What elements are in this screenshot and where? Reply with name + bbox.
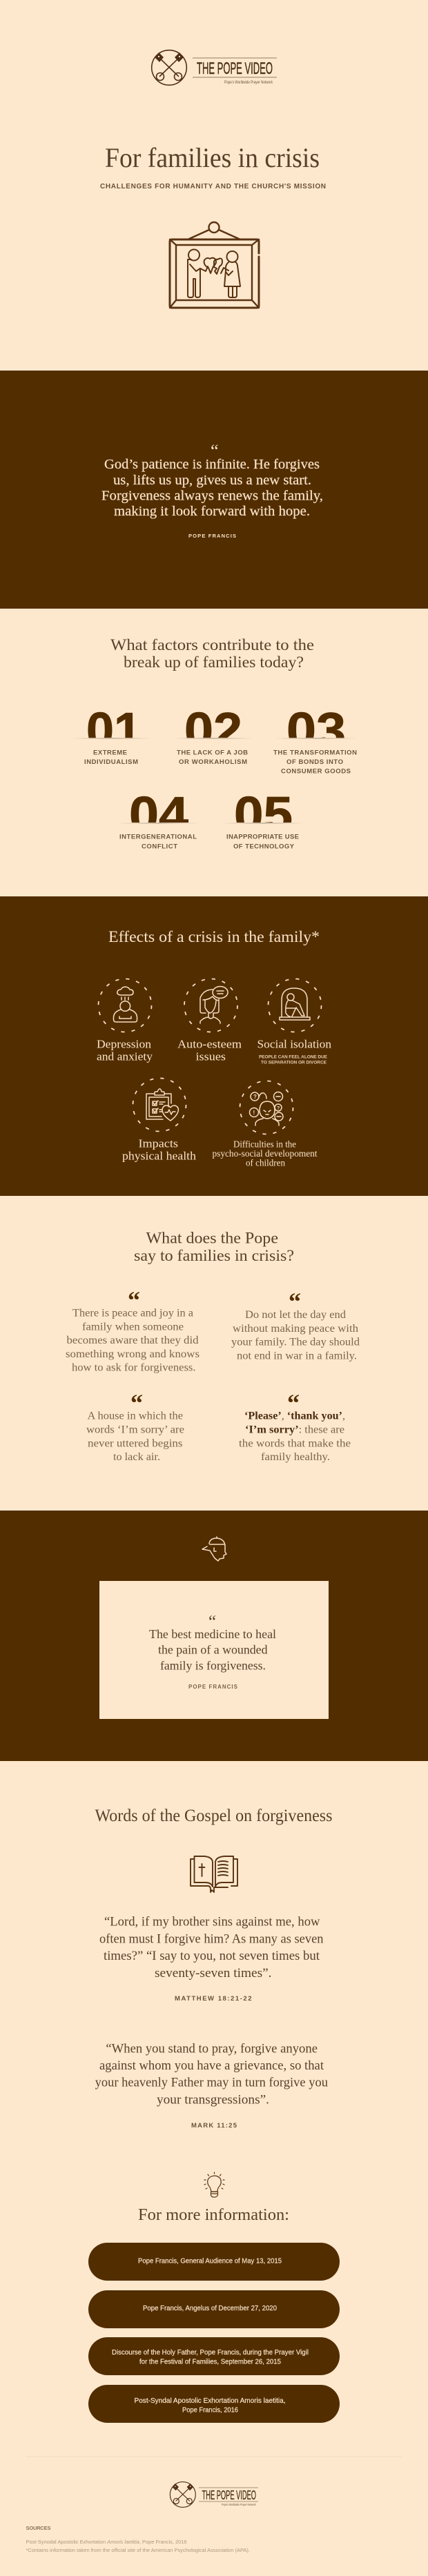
gospel quote: Matthew: often must I forgive him? As many as seven [99, 1931, 324, 1946]
pope quote: please thank you: the words that make the [239, 1437, 351, 1449]
heading: what does the Pope say: say to families in crisis? [134, 1247, 294, 1264]
gospel quote: Mark: your transgressions”. [157, 2092, 269, 2107]
pope quote: sorry: A house in which the [87, 1410, 183, 1422]
attribution: POPE FRANCIS [188, 533, 236, 539]
gospel quote: Mark: against whom you have a grievance, so that [99, 2058, 324, 2073]
icon: light bulb [204, 2172, 224, 2197]
factor 02: 02 [184, 703, 242, 758]
gospel quote: Matthew: times?” “I say to you, not seven times but [104, 1949, 320, 1963]
icon: pope head [202, 1537, 226, 1561]
icon: open bible [191, 1856, 237, 1892]
card quote: the pain of a wounded [158, 1643, 268, 1657]
factor 01: 01 [86, 703, 142, 758]
gospel quote: Matthew: seventy-seven times”. [155, 1966, 272, 1980]
effect: difficulties in psycho-social development: ! [253, 1110, 255, 1116]
footer logo [170, 2482, 258, 2507]
pope quote: peace and joy: There is peace and joy in a [72, 1308, 193, 1319]
effect: difficulties in psycho-social development: ? [253, 1094, 257, 1100]
pope quote: sorry: “ [130, 1389, 143, 1417]
gospel quote: Mark [95, 2041, 328, 2130]
card quote [149, 1627, 276, 1672]
pope quote: peace and joy: “ [128, 1286, 140, 1314]
link pill 2 [88, 2290, 340, 2328]
factor 03: OF BONDS INTO [286, 758, 343, 766]
heading: effects: Effects of a crisis in the family* [108, 928, 320, 945]
effect: social isolation: TO SEPARATION OR DIVORCE [261, 1060, 327, 1065]
pope quote: peace and joy: how to ask for forgiveness. [72, 1362, 196, 1374]
link pill 4: Post-Syndal Apostolic Exhortation Amoris laetitia, [134, 2397, 286, 2405]
factor 04 [120, 796, 197, 849]
factor 01: EXTREME [93, 749, 127, 756]
pope quote: day end: not end in war in a family. [237, 1350, 357, 1361]
link pill 1: Pope Francis, General Audience of May 13, 2015 [138, 2257, 282, 2265]
logo: The Pope Video [152, 50, 277, 85]
footer logo: Pope's Worldwide Prayer Network [222, 2503, 256, 2506]
gospel quote: Mark: “When you stand to pray, forgive anyone [106, 2041, 318, 2056]
factor 05 [226, 796, 299, 849]
logo: The Pope Video: THE POPE VIDEO [197, 59, 273, 78]
effect: social isolation [257, 979, 332, 1065]
icon: framed couple holding a broken heart [170, 222, 259, 308]
pope quote: sorry: to lack air. [113, 1451, 160, 1463]
quote mark: “ [211, 441, 219, 461]
card [99, 1581, 329, 1719]
heading: words of the Gospel: Words of the Gospel on forgiveness [95, 1807, 333, 1825]
sources [26, 2525, 250, 2553]
link pill 4: Pope Francis, 2016 [182, 2406, 238, 2414]
factor 04: 04 [129, 787, 188, 843]
factor 03: THE TRANSFORMATION [273, 749, 357, 756]
gospel quote: Mark: your heavenly Father may in turn forgive you [95, 2076, 328, 2090]
effect: depression and anxiety [97, 979, 153, 1063]
gospel quote: Matthew: MATTHEW 18:21-22 [175, 1995, 251, 2003]
effect: difficulties in psycho-social development: of children [246, 1157, 285, 1168]
effect: impacts physical health [122, 1078, 197, 1162]
pope quote: peace and joy: something wrong and knows [66, 1348, 200, 1360]
link pill 4 [88, 2385, 340, 2423]
quote text [101, 457, 323, 519]
pope quote: sorry: never uttered begins [88, 1437, 182, 1449]
sources: *Contains information taken from the official site of the American Psychological Association (APA). [26, 2547, 250, 2553]
factor 05: OF TECHNOLOGY [233, 843, 295, 850]
factor 03: CONSUMER GOODS [281, 767, 351, 776]
quote text: Forgiveness always renews the family, [101, 489, 323, 504]
gospel quote: Matthew: “Lord, if my brother sins against me, how [104, 1915, 320, 1929]
footer logo: THE POPE VIDEO [202, 2488, 256, 2502]
effect: depression and anxiety: and anxiety [97, 1050, 153, 1063]
subtitle: CHALLENGES FOR HUMANITY AND THE CHURCH'S MISSION [100, 183, 326, 190]
effect: impacts physical health: physical health [122, 1150, 197, 1162]
factor 05: INAPPROPRIATE USE [226, 834, 299, 840]
effect: difficulties in psycho-social development [213, 1081, 318, 1168]
pope quote: please thank you: “ [287, 1389, 300, 1417]
factor 02: THE LACK OF A JOB [177, 749, 248, 756]
card quote: family is forgiveness. [160, 1658, 266, 1672]
effect: difficulties in psycho-social development: Difficulties in the [233, 1139, 296, 1150]
logo: The Pope Video: Pope's Worldwide Prayer Network [224, 81, 273, 85]
effect: auto-esteem issues: Auto-esteem [177, 1038, 242, 1050]
factor 03: 03 [286, 703, 346, 758]
card quote: The best medicine to heal [149, 1627, 276, 1641]
effect: social isolation: Social isolation [257, 1038, 332, 1050]
factor 04: INTERGENERATIONAL [119, 834, 197, 840]
pope quote: day end: Do not let the day end [245, 1309, 346, 1321]
pope quote: please thank you: ‘I’m sorry’: these are [245, 1424, 344, 1435]
pope quote: day end: your family. The day should [231, 1336, 360, 1348]
pope quote: sorry: words ‘I’m sorry’ are [86, 1424, 184, 1435]
pope quote: day end: “ [289, 1288, 301, 1315]
gospel quote: Mark: MARK 11:25 [191, 2122, 237, 2130]
panel: effects of a crisis [0, 896, 428, 1196]
factor 02 [177, 712, 247, 764]
pope quote: peace and joy: family when someone [82, 1321, 184, 1333]
card quote mark: “ [208, 1613, 216, 1631]
effect: depression and anxiety: Depression [97, 1038, 152, 1050]
pope quote: sorry [86, 1389, 184, 1463]
panel: opening quote [0, 371, 428, 609]
factor 02: OR WORKAHOLISM [179, 758, 247, 766]
effect: auto-esteem issues: issues [196, 1050, 226, 1063]
link pill 2: Pope Francis, Angelus of December 27, 2020 [143, 2304, 277, 2312]
quote text: God’s patience is infinite. He forgives [104, 457, 320, 472]
sources: Post-Synodal Apostolic Exhortation Amoris laetitia, Pope Francis, 2016 [26, 2539, 186, 2545]
gospel quote: Matthew [99, 1915, 324, 2003]
effect: difficulties in psycho-social development: psycho-social developoment [213, 1148, 318, 1159]
pope quote: please thank you: ‘Please’, ‘thank you’, [244, 1410, 345, 1422]
effect: difficulties in psycho-social development: ? [277, 1106, 280, 1111]
pope quote: day end: without making peace with [233, 1323, 358, 1335]
heading: factors: break up of families today? [124, 653, 304, 671]
card attribution: POPE FRANCIS [188, 1684, 238, 1690]
panel: forgiveness quote [0, 1511, 428, 1761]
heading: what does the Pope say [134, 1230, 294, 1264]
effect: impacts physical health: Impacts [138, 1137, 178, 1150]
heading: what does the Pope say: What does the Pope [146, 1230, 278, 1247]
pope quote: please thank you: family healthy. [261, 1451, 330, 1463]
factor 03 [273, 712, 356, 773]
pope quote: please thank you [239, 1389, 351, 1463]
heading: factors: What factors contribute to the [110, 636, 314, 653]
link pill 1 [88, 2243, 340, 2281]
pope quote: day end [231, 1288, 360, 1361]
sources: SOURCES [26, 2525, 51, 2531]
heading: factors [110, 636, 314, 671]
link pill 3: Discourse of the Holy Father, Pope Francis, during the Prayer Vigil [112, 2348, 309, 2357]
factor 04: CONFLICT [142, 843, 177, 850]
effect: social isolation: PEOPLE CAN FEEL ALONE DUE [259, 1054, 328, 1060]
factor 01 [78, 712, 145, 764]
pope quote: peace and joy: becomes aware that they did [66, 1335, 199, 1346]
effect: auto-esteem issues [177, 979, 242, 1063]
link pill 3 [88, 2337, 340, 2375]
pope quote: peace and joy [66, 1286, 200, 1374]
factor 05: 05 [234, 787, 293, 843]
title: For families in crisis [105, 142, 320, 173]
quote text: making it look forward with hope. [114, 504, 310, 519]
heading: for more information: For more information: [138, 2206, 289, 2224]
factor 01: INDIVIDUALISM [84, 758, 138, 766]
link pill 3: for the Festival of Families, September 26, 2015 [139, 2357, 281, 2366]
quote text: us, lifts us up, gives us a new start. [113, 473, 311, 488]
